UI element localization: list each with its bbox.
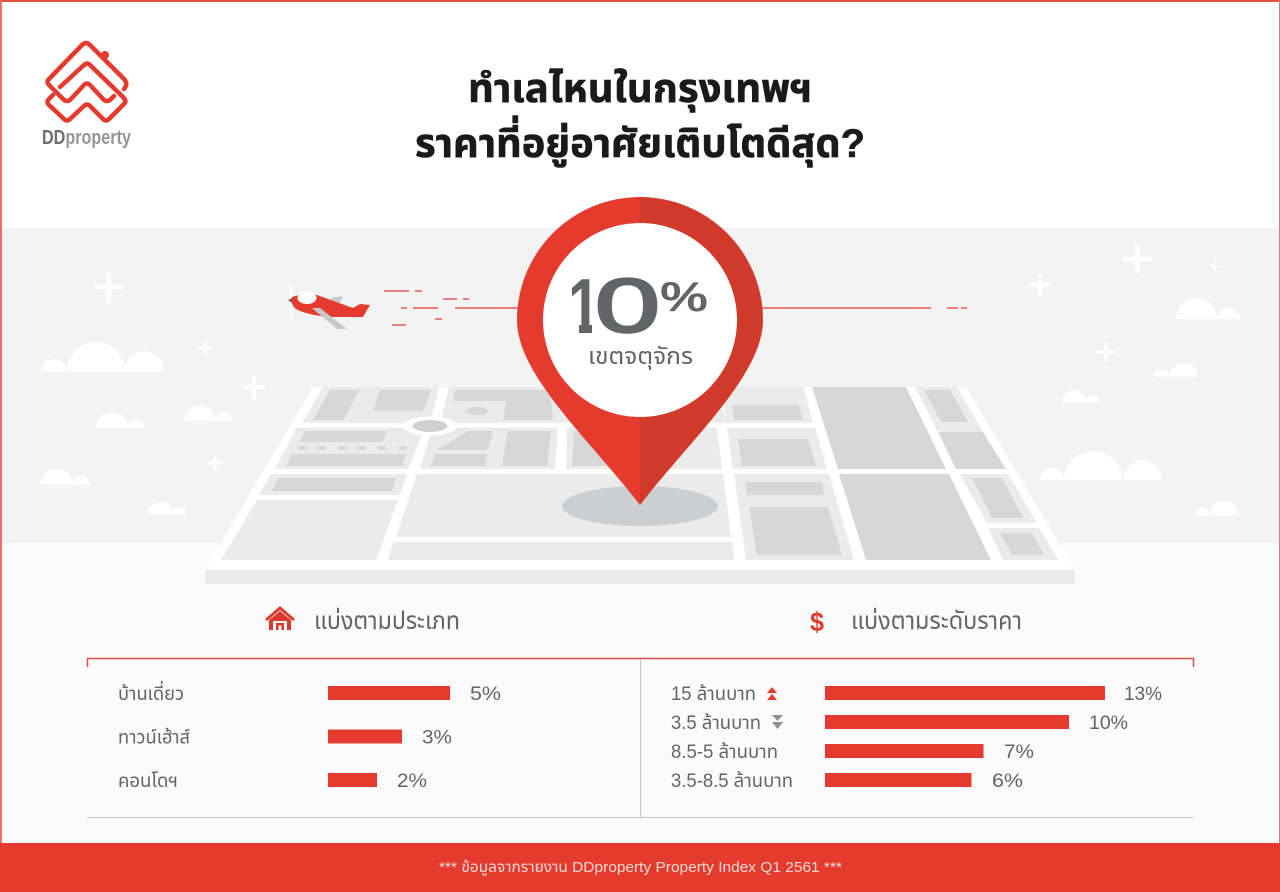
pin caption: เขตจตุจักร <box>588 343 693 370</box>
row: 5 to 8.5 million: 8.5-5 ล้านบาท <box>671 740 778 763</box>
map base slab <box>205 570 1075 584</box>
row: 15 million up: 15 ล้านบาท <box>671 682 756 705</box>
section heading: by type <box>265 606 460 635</box>
sparkles <box>97 247 1219 469</box>
speed lines <box>384 291 967 325</box>
logo wordmark: DDproperty <box>42 127 132 149</box>
row: 3.5 million down <box>671 711 1128 734</box>
title: ราคาที่อยู่อาศัยเติบโตดีสุด? <box>415 115 865 168</box>
row: condo: คอนโดฯ <box>118 771 178 792</box>
map dark blocks <box>272 387 1044 560</box>
title: ทำเลไหนในกรุงเทพฯ <box>468 67 812 113</box>
icon: house diamond mark <box>48 43 126 120</box>
clouds <box>41 298 1240 515</box>
map <box>205 387 1075 584</box>
row: townhouse: ทาวน์เฮ้าส์ <box>118 726 190 748</box>
row: 3.5 to 8.5 million <box>671 769 1023 792</box>
footer source text: *** ข้อมูลจากรายงาน DDproperty Property Index Q1 2561 *** <box>439 859 842 876</box>
big number 10 percent: 1 <box>568 262 600 350</box>
big number 10 percent <box>572 277 707 334</box>
title <box>415 67 865 168</box>
row: 3.5 million down: 3.5 ล้านบาท <box>671 711 761 734</box>
bar chart: by type <box>118 680 501 792</box>
big number 10 percent: 0 <box>595 264 660 349</box>
logo: DDproperty <box>42 43 132 149</box>
icon: location pin <box>517 197 763 505</box>
icon: airplane <box>288 283 370 329</box>
panel: grey sky band <box>2 228 1279 543</box>
row: 15 million up: 13% <box>1124 684 1162 705</box>
big number 10 percent: % <box>660 273 708 320</box>
icon: house <box>265 606 295 630</box>
map roundabout <box>403 416 457 436</box>
footer band <box>0 843 1280 892</box>
pin left half <box>517 197 640 505</box>
row: condo: 2% <box>397 771 427 792</box>
heading text: แบ่งตามระดับราคา <box>851 607 1022 635</box>
row: 3.5 million down: 10% <box>1089 713 1128 734</box>
pin white disc <box>543 223 737 417</box>
pin shadow <box>562 486 718 526</box>
map white road surface <box>205 387 1075 570</box>
bar chart: by price <box>671 682 1162 792</box>
row: 3.5 to 8.5 million: 6% <box>992 771 1023 792</box>
map light blocks <box>221 387 1058 560</box>
row: townhouse: 3% <box>422 728 452 748</box>
pin right half <box>640 197 763 505</box>
row: 5 to 8.5 million <box>671 740 1034 763</box>
row: condo <box>118 771 427 792</box>
row: detached house: 5% <box>470 684 501 705</box>
section heading: by price <box>810 607 1022 637</box>
row: townhouse <box>118 726 452 748</box>
heading text: แบ่งตามประเภท <box>314 607 460 635</box>
row: 15 million up <box>671 682 1162 705</box>
row: 3.5 to 8.5 million: 3.5-8.5 ล้านบาท <box>671 769 793 792</box>
row: detached house: บ้านเดี่ยว <box>118 680 184 705</box>
row: 5 to 8.5 million: 7% <box>1004 742 1034 763</box>
icon: dollar: $ <box>810 607 824 637</box>
chart frame <box>87 658 1194 818</box>
row: detached house <box>118 680 501 705</box>
